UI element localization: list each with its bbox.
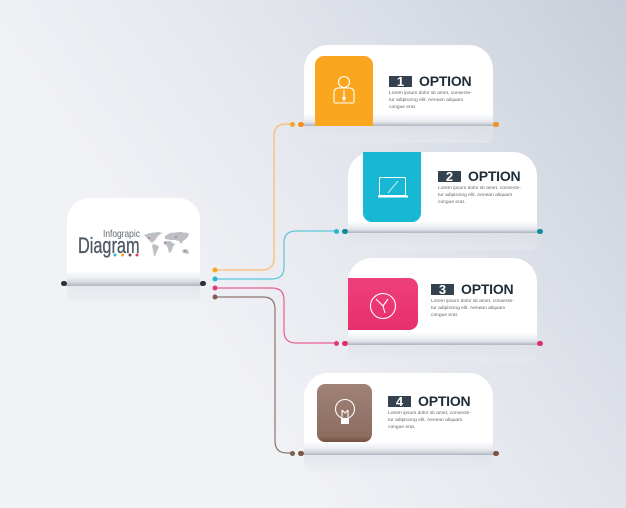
panel: option 2 (334, 152, 543, 234)
badge: 4: 4 (396, 394, 403, 409)
text: option 1: congue erat. (389, 105, 416, 110)
heading: Diagram: Diagram (78, 233, 140, 258)
panel: option 1 (290, 45, 499, 127)
text: option 4: congue erat. (388, 425, 415, 430)
badge: 3 (431, 284, 454, 295)
badge: 3: 3 (439, 282, 446, 297)
text: option 2: tur adipiscing elit. Aenean aliquam (438, 193, 512, 198)
text: option 3: Lorem ipsum dolor sit amet, consecte- (431, 299, 514, 304)
heading: option 1: OPTION (419, 73, 471, 89)
icon tile: person (315, 56, 373, 126)
text: option 4: Lorem ipsum dolor sit amet, consecte- (388, 411, 471, 416)
text: option 4 (388, 410, 471, 430)
text: option 1 (389, 90, 472, 110)
text: option 3: tur adipiscing elit. Aenean aliquam (431, 306, 505, 311)
text: option 4: tur adipiscing elit. Aenean aliquam (388, 418, 462, 423)
text: option 2 (438, 186, 521, 205)
badge: 2 (438, 171, 461, 182)
heading: option 2: OPTION (468, 168, 520, 184)
panel: option 3 (334, 258, 543, 346)
icon: world map (144, 232, 189, 256)
text: option 2: congue erat. (438, 200, 465, 205)
text: option 2: Lorem ipsum dolor sit amet, consecte- (438, 186, 521, 191)
badge: 2: 2 (446, 169, 453, 184)
connector origin dots (212, 268, 218, 300)
text: option 1: Lorem ipsum dolor sit amet, consecte- (389, 91, 472, 96)
heading: option 3: OPTION (461, 281, 513, 297)
heading: Infographic: Infograpic (103, 228, 140, 240)
heading: option 4: OPTION (418, 393, 470, 409)
icon tile: laptop (363, 152, 421, 222)
icon tile: clock (348, 278, 418, 330)
text: option 3 (431, 298, 514, 318)
badge: 4 (388, 396, 411, 407)
text: option 3: congue erat. (431, 313, 458, 318)
icon tile: light bulb (317, 384, 372, 442)
colour dots (114, 254, 138, 256)
panel: main title card (61, 198, 218, 300)
text: option 1: tur adipiscing elit. Aenean aliquam (389, 98, 463, 103)
badge: 1 (389, 76, 412, 87)
badge: 1: 1 (397, 74, 404, 89)
panel: option 4 (290, 373, 499, 460)
